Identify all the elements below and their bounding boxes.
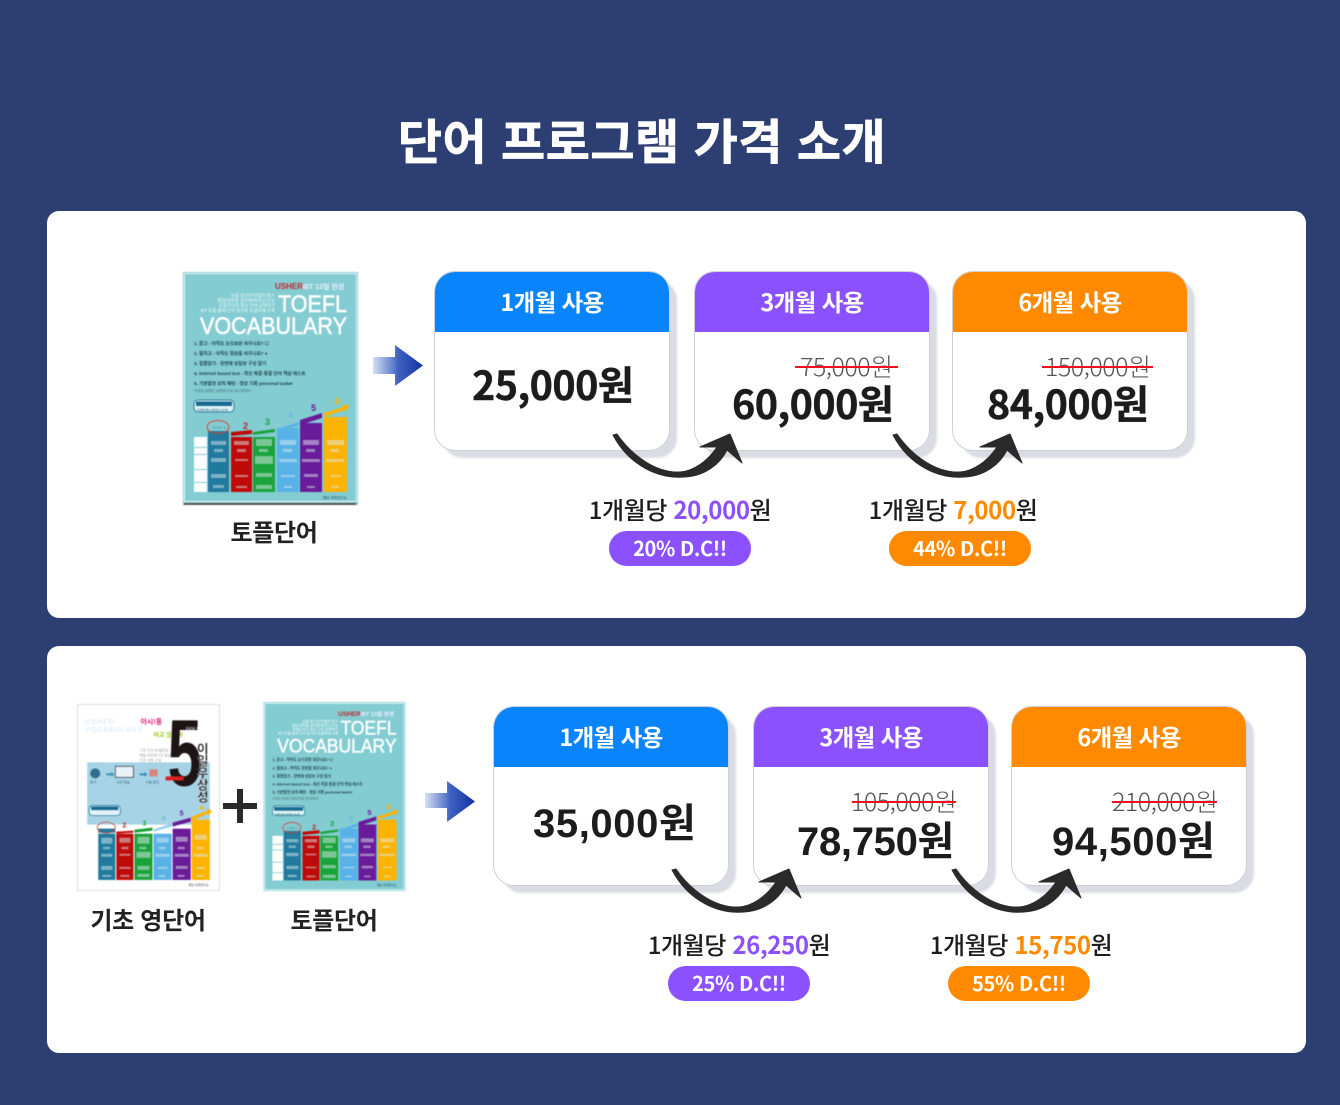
card header bbox=[953, 272, 1187, 332]
strikethrough bbox=[1042, 366, 1153, 368]
book cover: TOEFL vocabulary: 준필수이자 필수 단어 공략하기 bbox=[219, 302, 275, 309]
book cover: TOEFL vocabulary: 6 bbox=[335, 396, 340, 406]
plan card: 1 month bbox=[494, 707, 728, 885]
book cover: basic vocabulary: 6 bbox=[200, 806, 204, 813]
title: 단어 프로그램 가격 소개 bbox=[398, 103, 886, 173]
book cover: basic vocabulary: 기초 단어 50일완성 bbox=[139, 747, 169, 752]
card header: 6개월 사용 bbox=[1018, 284, 1122, 318]
arrow: to pricing bbox=[425, 781, 475, 822]
book cover: TOEFL vocabulary: 4. Internet based test - 최신 복합·통합 단어 핵심 테스트 bbox=[272, 782, 363, 787]
book cover: TOEFL vocabulary: 5 bbox=[311, 403, 316, 413]
discounted price: 84,000원 bbox=[987, 374, 1149, 431]
card header: 1개월 사용 bbox=[500, 284, 604, 318]
book cover: TOEFL vocabulary: 5. 기본발전 상처 패턴 - 영상 기록 personal tasker bbox=[194, 380, 293, 387]
discounted price: 60,000원 bbox=[732, 374, 894, 431]
book cover: basic vocabulary: 5 bbox=[180, 811, 184, 818]
book cover: basic vocabulary: 2 bbox=[122, 823, 126, 830]
book cover: basic vocabulary: 비교 암기어 bbox=[154, 731, 183, 739]
strikethrough bbox=[795, 366, 898, 368]
book cover: TOEFL vocabulary: 6 bbox=[387, 802, 391, 811]
book cover: basic vocabulary: VOCABULARY bbox=[85, 727, 143, 734]
discounted price: 78,750원 bbox=[797, 820, 954, 864]
arrow: to pricing bbox=[373, 345, 423, 386]
strikethrough bbox=[1112, 801, 1217, 803]
book cover: TOEFL vocabulary: 3. 집중암기 - 한번에 상담보 구성 암기 bbox=[272, 773, 331, 778]
book cover: TOEFL vocabulary: 2 bbox=[312, 822, 316, 831]
book cover: TOEFL vocabulary: 4 bbox=[349, 813, 354, 822]
book cover: TOEFL vocabulary: 해브 어학연구소 bbox=[323, 495, 348, 500]
book cover: TOEFL vocabulary: STEP 1 bbox=[287, 826, 298, 830]
book cover: basic vocabulary: USHER bbox=[85, 719, 115, 726]
book cover: TOEFL vocabulary: iBT 토플 출제 단어 암기와 토플독해 수록 bbox=[201, 307, 275, 314]
plan card: 3 months bbox=[754, 707, 988, 885]
original price: 150,000원 bbox=[1045, 348, 1151, 384]
discount badge: 20% D.C!! bbox=[633, 533, 727, 562]
monthly price: 3 months: 1개월당 26,250원 bbox=[648, 926, 830, 961]
card header: 3개월 사용 bbox=[760, 284, 864, 318]
book cover: basic vocabulary bbox=[76, 704, 220, 892]
label: 기초 영단어: 기초 영단어 bbox=[90, 901, 206, 936]
book cover: TOEFL vocabulary: TOEFL bbox=[278, 291, 347, 318]
book cover: TOEFL vocabulary: 2. 말하고 - 아직도 뜻만을 외우나요? ● bbox=[194, 350, 268, 357]
pricing plans: basic plus TOEFL vocabulary bbox=[493, 706, 1255, 1001]
card header bbox=[754, 707, 988, 767]
book cover: TOEFL vocabulary: 5 bbox=[367, 808, 371, 817]
label: 토플단어: 토플단어 bbox=[290, 901, 378, 936]
card header bbox=[435, 272, 669, 332]
book cover: basic vocabulary: 아시!통 bbox=[140, 717, 163, 726]
plan card: 3 months bbox=[695, 272, 929, 450]
book cover: TOEFL vocabulary: iBT 토플 출제 단어 암기와 토플독해 수록 bbox=[278, 730, 339, 735]
book cover: basic vocabulary: 4 bbox=[162, 816, 166, 823]
discount badge: 25% D.C!! bbox=[692, 968, 786, 997]
book cover: basic vocabulary: 단어 5 bbox=[186, 726, 199, 733]
strikethrough bbox=[852, 801, 956, 803]
book cover: TOEFL vocabulary: USHER bbox=[275, 282, 303, 291]
arrow: 1 month to 3 months bbox=[672, 869, 801, 912]
card header bbox=[695, 272, 929, 332]
book cover: TOEFL vocabulary: 편입/대학원 공무원/특목고/수능 bbox=[292, 722, 339, 727]
book cover: TOEFL vocabulary bbox=[262, 701, 406, 892]
book cover: TOEFL vocabulary: collectiv.usher.co.kr bbox=[275, 812, 300, 816]
book cover: TOEFL vocabulary: 4. Internet based test - 최신 복합·통합 단어 핵심 테스트 bbox=[194, 370, 306, 377]
book cover: TOEFL vocabulary: 3 bbox=[265, 417, 270, 427]
original price: 105,000원 bbox=[851, 783, 957, 819]
book cover: TOEFL vocabulary: iBT 13일 완성 bbox=[302, 282, 344, 291]
curved arrows bbox=[612, 434, 1022, 478]
discount badge bbox=[668, 966, 810, 1001]
book cover: TOEFL vocabulary: 자세한 설명은 설명회/무료 워크북에서 bbox=[272, 795, 319, 800]
book cover: TOEFL vocabulary: 준필수이자 필수 단어 공략하기 bbox=[293, 726, 338, 731]
price: 25,000원 bbox=[472, 355, 634, 412]
book cover: TOEFL vocabulary: 토플 듣기/아이엘츠/텝스 bbox=[231, 292, 275, 299]
book cover: TOEFL vocabulary: 3. 집중암기 - 한번에 상담보 구성 암기 bbox=[194, 360, 266, 367]
discount badge: 44% D.C!! bbox=[913, 533, 1007, 562]
book cover: TOEFL vocabulary: 편입/대학원 공무원/특목고/수능 bbox=[218, 297, 275, 304]
discount badge: 55% D.C!! bbox=[972, 968, 1066, 997]
book cover: basic vocabulary: 3 bbox=[142, 821, 146, 828]
arrow: 3 months to 6 months bbox=[893, 434, 1022, 477]
monthly price: 6 months: 1개월당 15,750원 bbox=[930, 926, 1112, 961]
book cover: basic vocabulary: 성 bbox=[197, 791, 209, 805]
book cover: TOEFL vocabulary: STEP 1 bbox=[212, 425, 226, 430]
book cover: basic vocabulary: 일 bbox=[197, 754, 209, 768]
book cover: TOEFL vocabulary: 자세한 설명은 설명회/무료 워크북에서 bbox=[194, 388, 251, 393]
book cover: basic vocabulary: 이 bbox=[197, 742, 209, 756]
discount badge bbox=[609, 531, 751, 566]
icon: plus bbox=[223, 789, 257, 823]
plan card: 6 months bbox=[1012, 707, 1246, 885]
book cover: TOEFL vocabulary: VOCABULARY bbox=[277, 735, 397, 757]
book cover: basic vocabulary: 상 bbox=[197, 778, 209, 792]
book cover: basic vocabulary: 구동 암기 bbox=[145, 779, 159, 784]
card header bbox=[1012, 707, 1246, 767]
book cover: TOEFL vocabulary: collectiv.usher.co.kr bbox=[197, 408, 229, 412]
book cover: TOEFL vocabulary: 2 bbox=[243, 421, 248, 431]
book cover: TOEFL vocabulary: 해브 어학연구소 bbox=[377, 882, 397, 887]
book cover: TOEFL vocabulary: VOCABULARY bbox=[200, 313, 347, 340]
book cover: basic vocabulary: 기초 어휘 구성 bbox=[139, 757, 161, 762]
monthly price: 3 months: 1개월당 20,000원 bbox=[589, 491, 771, 526]
card header bbox=[494, 707, 728, 767]
book cover: basic vocabulary: 매일 외우면 3주 완성 bbox=[139, 752, 171, 757]
book cover: basic vocabulary: 시각 학습 bbox=[116, 779, 130, 784]
book cover: TOEFL vocabulary bbox=[182, 271, 359, 506]
arrow: 1 month to 3 months bbox=[613, 434, 742, 477]
original price: 75,000원 bbox=[800, 348, 893, 384]
card header: 6개월 사용 bbox=[1077, 719, 1181, 753]
card header: 1개월 사용 bbox=[559, 719, 663, 753]
book cover: TOEFL vocabulary: USHER bbox=[338, 711, 361, 718]
discount badge bbox=[889, 531, 1031, 566]
book cover: TOEFL vocabulary: 1. 듣고 - 아직도 눈으로만 외우나요? ☐ bbox=[194, 340, 270, 347]
book cover: TOEFL vocabulary: iBT 13일 완성 bbox=[360, 710, 394, 718]
book cover: TOEFL vocabulary: 5. 기본발전 상처 패턴 - 영상 기록 personal tasker bbox=[272, 790, 353, 795]
plan card: 6 months bbox=[953, 272, 1187, 450]
discount badge bbox=[948, 966, 1090, 1001]
book cover: TOEFL vocabulary: 토플 듣기/아이엘츠/텝스 bbox=[303, 718, 339, 723]
book cover: TOEFL vocabulary: 3 bbox=[330, 819, 334, 828]
book cover: TOEFL vocabulary: 1. 듣고 - 아직도 눈으로만 외우나요? ☐ bbox=[272, 757, 334, 762]
pricing plans: TOEFL vocabulary bbox=[434, 271, 1196, 566]
panel: basic plus TOEFL vocabulary pricing bbox=[47, 646, 1306, 1053]
discounted price: 94,500원 bbox=[1052, 820, 1215, 864]
book cover: TOEFL vocabulary: 4 bbox=[288, 410, 293, 420]
book cover: basic vocabulary: 우 bbox=[197, 766, 209, 780]
book cover: TOEFL vocabulary: 2. 말하고 - 아직도 뜻만을 외우나요? ● bbox=[272, 765, 332, 770]
book cover: TOEFL vocabulary: TOEFL bbox=[341, 717, 397, 739]
card header: 3개월 사용 bbox=[819, 719, 923, 753]
monthly price: 6 months: 1개월당 7,000원 bbox=[869, 491, 1037, 526]
plan card: 1 month bbox=[435, 272, 669, 450]
arrow: 3 months to 6 months bbox=[952, 869, 1081, 912]
curved arrows bbox=[672, 868, 1082, 913]
label: 토플단어: 토플단어 bbox=[230, 513, 318, 548]
book cover: basic vocabulary: 듣기 bbox=[90, 779, 96, 784]
original price: 210,000원 bbox=[1112, 783, 1218, 819]
price: 35,000원 bbox=[533, 802, 696, 846]
book cover: basic vocabulary: 해브 어학연구소 bbox=[189, 882, 209, 887]
panel: TOEFL vocabulary pricing bbox=[47, 211, 1306, 618]
